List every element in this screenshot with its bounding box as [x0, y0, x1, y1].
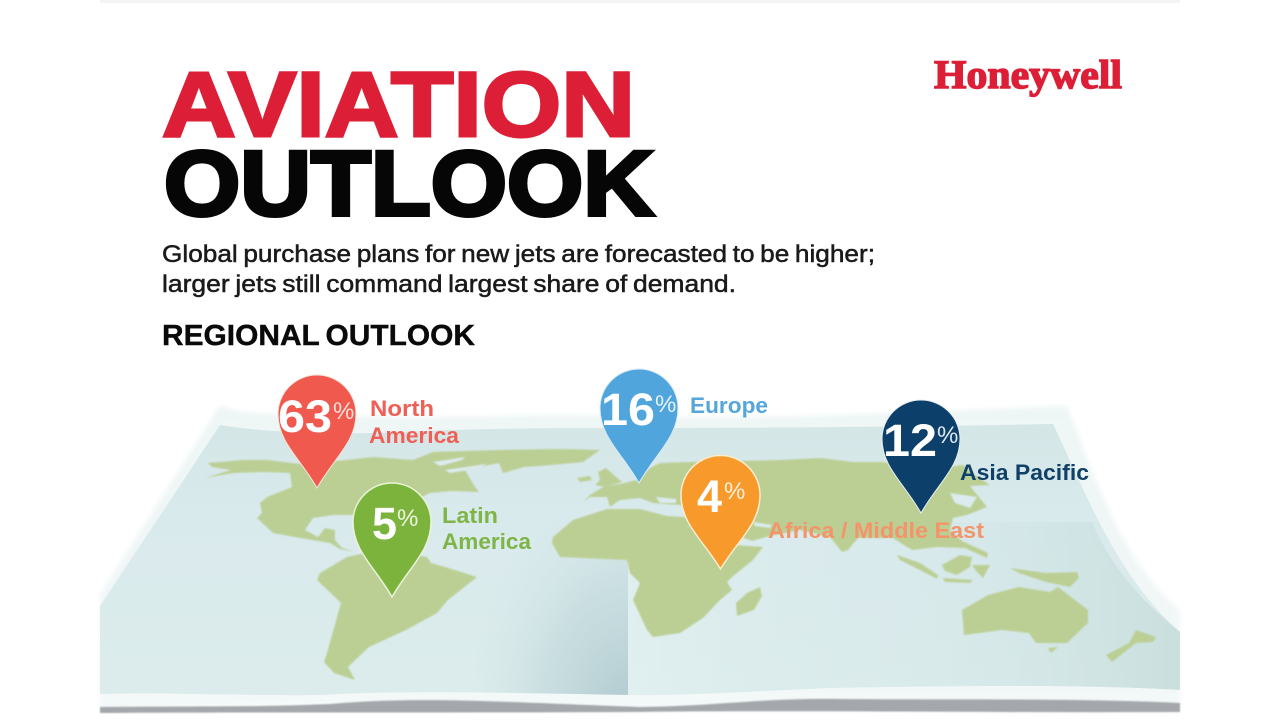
pin: north america 63%: [278, 375, 356, 488]
pin: africa / middle east 4%: [681, 456, 760, 569]
inland seas: [433, 457, 977, 528]
pin: north america 63%: 63: [278, 391, 332, 442]
land: north america: [205, 449, 600, 552]
pin: europe 16%: [600, 369, 678, 483]
label: europe: Europe: [690, 393, 768, 418]
heading: regional outlook: REGIONAL OUTLOOK: [162, 320, 475, 352]
land: new guinea: [1010, 568, 1079, 587]
pin: latin america 5%: %: [397, 505, 418, 532]
landmasses: [205, 449, 1156, 680]
label: north america: North: [370, 396, 434, 421]
land: africa: [552, 509, 763, 637]
land: sulawesi: [972, 565, 990, 578]
land: new zealand: [1106, 630, 1156, 662]
land: eurasia: [583, 458, 990, 558]
land: sumatra: [897, 555, 938, 579]
label: latin america: [442, 503, 532, 554]
title: [162, 54, 654, 235]
pin: europe 16%: 16: [601, 384, 655, 435]
title: AVIATION: [162, 54, 635, 156]
land: java: [943, 578, 973, 583]
map sea: [100, 424, 1180, 695]
pin: latin america 5%: 5: [372, 498, 397, 549]
pin: north america 63%: %: [333, 398, 354, 425]
logo: Honeywell: Honeywell: [934, 52, 1122, 97]
land: madagascar: [736, 587, 762, 616]
subtitle: [162, 241, 875, 298]
land: ireland: [577, 476, 592, 482]
map bottom edge shadow: [100, 699, 1180, 713]
subtitle: larger jets still command largest share of demand.: [162, 271, 736, 298]
pin: asia pacific 12%: 12: [883, 415, 937, 466]
label: africa / middle east: Africa / Middle East: [768, 518, 985, 543]
pin: europe 16%: %: [655, 391, 676, 418]
land: south america: [317, 552, 477, 680]
label: latin america: America: [442, 529, 532, 554]
label: latin america: Latin: [442, 503, 498, 528]
pin: asia pacific 12%: %: [937, 422, 958, 449]
label: asia pacific: Asia Pacific: [960, 460, 1089, 485]
label: north america: America: [369, 423, 460, 448]
map fold shading: [312, 522, 628, 695]
land: borneo: [942, 555, 972, 575]
pin: africa / middle east 4%: %: [724, 478, 745, 505]
land: tasmania: [1048, 647, 1058, 653]
land: uk: [595, 468, 622, 487]
map paper: [100, 406, 1180, 708]
label: north america: [369, 396, 460, 448]
pin: latin america 5%: [353, 483, 431, 597]
subtitle: Global purchase plans for new jets are forecasted to be higher;: [162, 241, 875, 268]
land: australia: [962, 587, 1088, 643]
title: OUTLOOK: [164, 133, 654, 235]
pin: africa / middle east 4%: 4: [697, 471, 722, 522]
world map: [100, 406, 1180, 713]
pin: asia pacific 12%: [882, 400, 960, 513]
